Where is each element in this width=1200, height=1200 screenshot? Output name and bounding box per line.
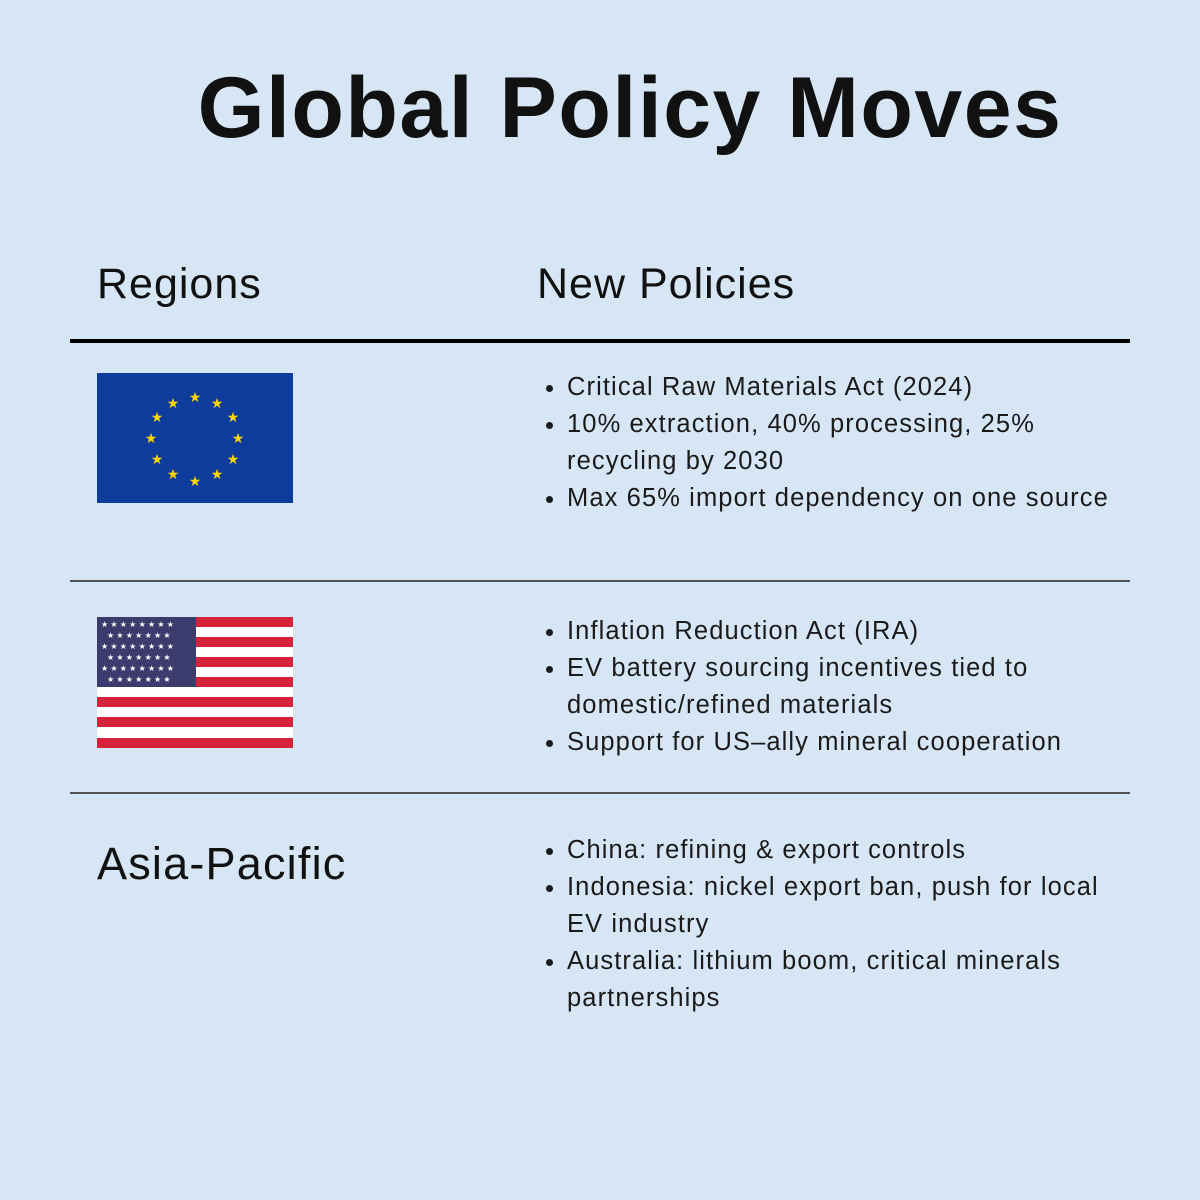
icon: EU flag — [97, 373, 293, 503]
Asia-Pacific policies: partnerships — [567, 984, 721, 1012]
Asia-Pacific policies: China: refining & export controls — [567, 836, 966, 864]
icon: EU flag: ★ — [211, 466, 223, 482]
icon: EU flag: ★ — [189, 389, 201, 405]
icon: EU flag: ★ — [211, 395, 223, 411]
icon: EU flag: ★ — [151, 409, 163, 425]
icon: US flag: ★ ★ ★ ★ ★ ★ ★ ★ — [101, 664, 174, 673]
icon: EU flag: ★ — [151, 451, 163, 467]
title: Global Policy Moves — [198, 60, 1062, 156]
US policies — [546, 617, 1062, 756]
region label: Asia-Pacific: Asia-Pacific — [97, 838, 346, 889]
US policies: Inflation Reduction Act (IRA) — [567, 617, 919, 645]
US policies: domestic/refined materials — [567, 691, 893, 719]
icon: US flag: ★ ★ ★ ★ ★ ★ ★ ★ — [101, 642, 174, 651]
EU policies: 10% extraction, 40% processing, 25% — [567, 410, 1035, 438]
icon: EU flag: ★ — [167, 466, 179, 482]
icon: EU flag: ★ — [145, 430, 157, 446]
EU policies — [546, 373, 1109, 512]
icon: US flag: ★ ★ ★ ★ ★ ★ ★ — [107, 631, 171, 640]
icon: EU flag: ★ — [189, 473, 201, 489]
icon: EU flag: ★ — [227, 409, 239, 425]
Asia-Pacific policies: Australia: lithium boom, critical minerals — [567, 947, 1061, 975]
header: regions: Regions — [97, 260, 262, 308]
icon: US flag: ★ ★ ★ ★ ★ ★ ★ ★ — [101, 620, 174, 629]
Asia-Pacific policies: EV industry — [567, 910, 710, 938]
EU policies: recycling by 2030 — [567, 447, 784, 475]
US policies: EV battery sourcing incentives tied to — [567, 654, 1028, 682]
EU policies: Critical Raw Materials Act (2024) — [567, 373, 973, 401]
header: new policies: New Policies — [537, 260, 795, 308]
icon: US flag: ★ ★ ★ ★ ★ ★ ★ — [107, 653, 171, 662]
icon: US flag: ★ ★ ★ ★ ★ ★ ★ — [107, 675, 171, 684]
icon: EU flag: ★ — [232, 430, 244, 446]
Asia-Pacific policies: Indonesia: nickel export ban, push for local — [567, 873, 1099, 901]
Asia-Pacific policies — [546, 836, 1099, 1012]
icon: EU flag: ★ — [227, 451, 239, 467]
US policies: Support for US–ally mineral cooperation — [567, 728, 1062, 756]
icon: EU flag: ★ — [167, 395, 179, 411]
icon: US flag — [97, 617, 293, 748]
EU policies: Max 65% import dependency on one source — [567, 484, 1109, 512]
